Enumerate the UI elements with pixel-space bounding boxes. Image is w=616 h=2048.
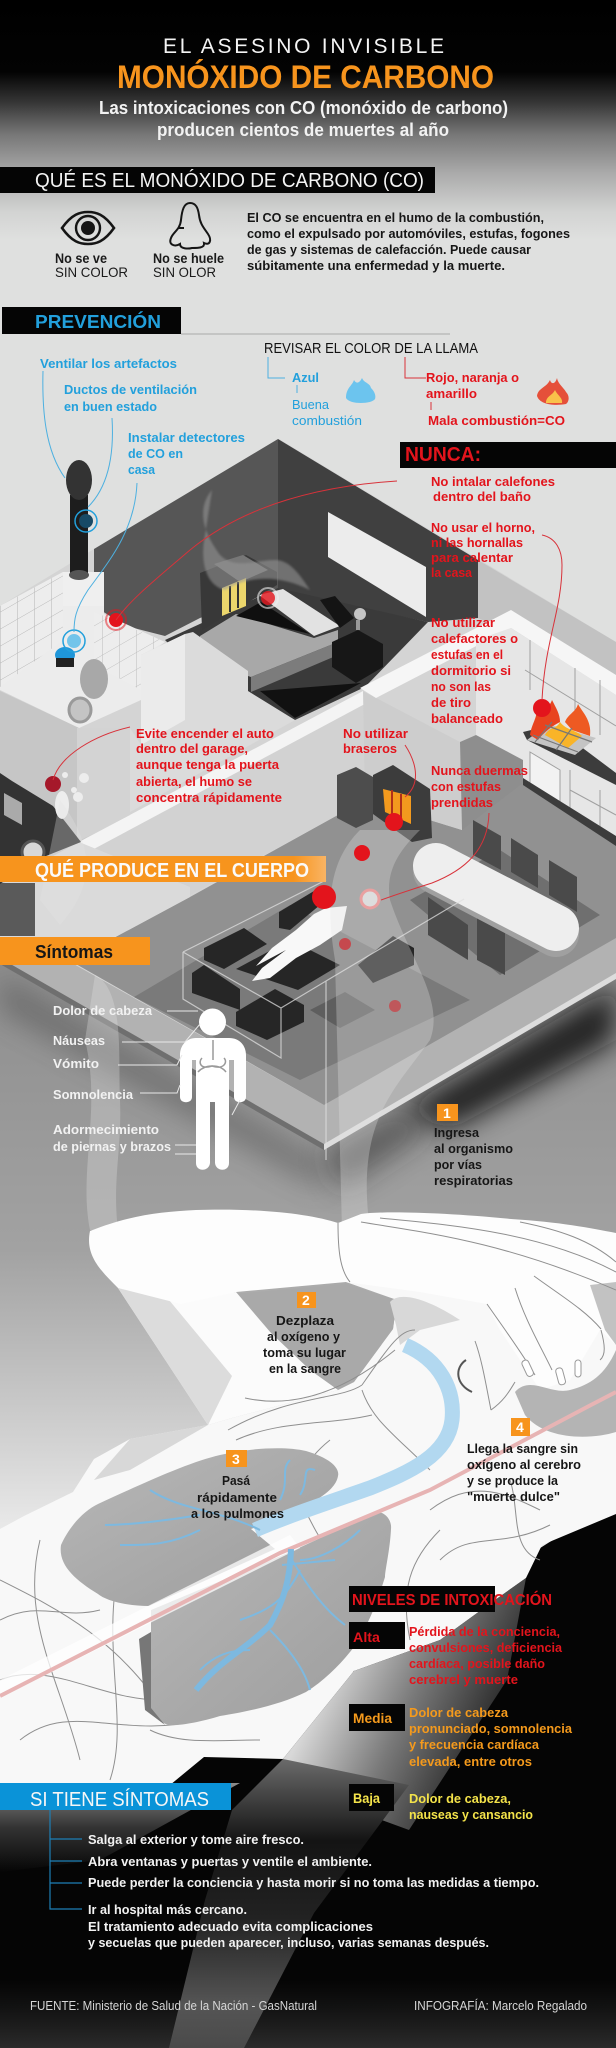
tip: detectores [128, 430, 245, 477]
heading: que produce en el cuerpo: QUÉ PRODUCE EN EL CUERPO [35, 859, 309, 882]
warning: estufas prendidas: prendidas [431, 795, 493, 810]
upper lung [61, 1448, 338, 1606]
low tile wall [94, 612, 165, 690]
level: media: y frecuencia cardíaca [409, 1737, 540, 1752]
blue flame text: Azul [292, 370, 319, 385]
lower grey band [169, 1759, 409, 2048]
nails [521, 1359, 581, 1385]
living room back wall [363, 691, 462, 830]
label: no se ve: No se ve [55, 250, 107, 266]
icon: blue flame [346, 378, 375, 403]
warning: horno: ni las hornallas [431, 535, 523, 550]
warning markers [45, 510, 551, 1012]
lung back edge [139, 1632, 165, 1725]
kitchen counter [523, 725, 616, 785]
under-arm grey [232, 1284, 397, 1390]
red flame text: Mala combustión=CO [428, 413, 565, 428]
step 4: Llega la sangre sin [467, 1441, 578, 1456]
red flame text [426, 370, 565, 428]
step 3: rápidamente [197, 1490, 277, 1505]
level: media [349, 1704, 573, 1769]
night table [332, 608, 383, 683]
step 1: al organismo [434, 1141, 513, 1156]
corner shadow [324, 1110, 430, 1190]
step 2: Dezplaza [276, 1313, 335, 1328]
wall band top [360, 610, 616, 698]
long wall face [79, 691, 365, 895]
step 1: Ingresa [434, 1125, 480, 1140]
warning: calefactores: calefactores o [431, 631, 518, 646]
long wall top [79, 691, 376, 850]
woman illustration [0, 1210, 616, 1785]
fireplace [373, 765, 432, 842]
toilet [69, 659, 108, 722]
label: no se ve: SIN COLOR [55, 264, 128, 280]
kitchen column [460, 735, 523, 830]
dining rug [410, 850, 600, 975]
car exhaust [55, 772, 89, 819]
tip: detectores: de CO en [128, 446, 183, 461]
panel: si tiene sintomas [0, 1783, 539, 1950]
car [0, 773, 81, 884]
storage box [337, 767, 373, 828]
hair shadow top [590, 1282, 616, 1345]
icon: nose [170, 203, 210, 249]
description: como el expulsado por automóviles, estufas, fogones [247, 226, 570, 241]
level: baja: nauseas y cansancio [409, 1807, 533, 1822]
symptom leader lines [118, 1011, 240, 1154]
action list: Abra ventanas y puertas y ventile el ambiente. [88, 1854, 372, 1869]
kitchen base line [523, 778, 616, 846]
heading bar: PREVENCIÓN [35, 311, 161, 332]
heading bar: SI TIENE SÍNTOMAS [30, 1788, 209, 1811]
list connector [50, 1810, 82, 1909]
level: alta: cardíaca, posible daño [409, 1656, 545, 1671]
step 4: oxígeno al cerebro [467, 1457, 581, 1472]
subtitle [99, 98, 508, 140]
kicker: EL ASESINO INVISIBLE [163, 35, 444, 58]
warning: calefactores [431, 615, 518, 726]
step 4: 4 [516, 1419, 524, 1435]
heading: sintomas: Síntomas [35, 942, 113, 962]
glass table outline [183, 880, 464, 1160]
heading bar: NUNCA: [405, 444, 481, 466]
panel: nunca [136, 442, 616, 810]
action list: Puede perder la conciencia y hasta morir si no toma las medidas a tiempo. [88, 1875, 539, 1890]
kitchen wall [476, 628, 616, 842]
level: baja [349, 1784, 533, 1822]
action list [88, 1832, 539, 1950]
description: súbitamente una enfermedad y la muerte. [247, 258, 505, 273]
callout lines: blue [43, 357, 297, 632]
tip: ductos: en buen estado [64, 399, 157, 414]
author credit: INFOGRAFÍA: Marcelo Regalado [414, 1998, 587, 2013]
level: alta: cerebrel y muerte [409, 1672, 518, 1687]
upper arm shade [118, 1288, 232, 1425]
dining table [436, 866, 556, 934]
garage wall [0, 691, 130, 885]
level: media: pronunciado, somnolencia [409, 1721, 573, 1736]
level: baja: Baja [353, 1790, 380, 1806]
description: El CO se encuentra en el humo de la combustión, [247, 210, 544, 225]
black strip [260, 683, 361, 718]
warning: calefactores: balanceado [431, 711, 503, 726]
rear wall left [94, 439, 278, 636]
step 2: toma su lugar [263, 1345, 346, 1360]
label: no se huele: SIN OLOR [153, 264, 216, 280]
blue flame text: combustión [292, 413, 362, 428]
heading: sintomas [0, 937, 150, 965]
step 3: Pasá [222, 1473, 251, 1488]
left body fade [0, 1783, 240, 1872]
heading: NIVELES DE INTOXICACIÓN [352, 1590, 552, 1609]
section: prevencion [2, 307, 569, 477]
tip: detectores: Instalar detectores [128, 430, 245, 445]
label: no se huele [153, 250, 224, 280]
house illustration [0, 439, 616, 1230]
tip: detectores: casa [128, 462, 156, 477]
step 3: a los pulmones [191, 1506, 284, 1521]
wardrobe [200, 555, 277, 630]
white band [0, 1535, 300, 1698]
step 2: 2 [302, 1292, 310, 1308]
label: no se ve [55, 250, 128, 280]
label: no se huele: No se huele [153, 250, 224, 266]
tip: ductos [64, 382, 197, 414]
level: media: Dolor de cabeza [409, 1705, 509, 1720]
step 1 [434, 1104, 513, 1188]
step 3 [191, 1450, 284, 1521]
warning: auto: dentro del garage, [136, 741, 248, 756]
warning: horno: para calentar [431, 550, 513, 565]
shoulder shade [94, 1425, 208, 1480]
rear wall right [278, 439, 478, 622]
icon: red flame [537, 378, 569, 405]
heading bar [0, 1783, 231, 1811]
upper grey band [283, 1578, 526, 1830]
warning: calefones: No intalar calefones [431, 474, 555, 489]
warning: auto: concentra rápidamente [136, 790, 282, 805]
heading bar: QUÉ ES EL MONÓXIDO DE CARBONO (CO) [35, 169, 424, 192]
warning: horno [431, 520, 535, 580]
warning: braseros: No utilizar [343, 726, 408, 741]
action list: El tratamiento adecuado evita complicaciones [88, 1919, 373, 1934]
tip: ductos: Ductos de ventilación [64, 382, 197, 397]
symptom labels: Vómito [53, 1056, 99, 1071]
warning: horno: No usar el horno, [431, 520, 535, 535]
heading bar [400, 442, 616, 468]
wall band right [478, 560, 616, 680]
warning: calefactores: de tiro [431, 695, 471, 710]
callout lines: red [53, 357, 562, 900]
symptom labels [53, 1003, 171, 1154]
flame heading: REVISAR EL COLOR DE LA LLAMA [264, 341, 478, 357]
warning: calefactores: dormitorio si [431, 663, 511, 678]
symptom labels: Náuseas [53, 1033, 105, 1048]
heading [349, 1586, 552, 1612]
level: alta [349, 1622, 563, 1687]
bathroom block [0, 572, 165, 728]
level: alta: Alta [353, 1629, 380, 1645]
level: alta: Pérdida de la conciencia, [409, 1624, 560, 1639]
forearm and hand [89, 1210, 616, 1390]
bedroom smoke [203, 490, 310, 590]
closed eye [458, 1360, 472, 1392]
step 4: "muerte dulce" [467, 1489, 560, 1504]
bedroom window [328, 512, 426, 617]
partition light face [141, 634, 185, 745]
heading bar [2, 307, 450, 334]
step 2: al oxígeno y [267, 1329, 341, 1344]
ground shadow right [400, 985, 616, 1130]
lower lung [148, 1512, 391, 1725]
upper arm [118, 1288, 338, 1425]
kitchen cabinets [525, 640, 616, 835]
action list: Ir al hospital más cercano. [88, 1902, 247, 1917]
hand and hair lines [0, 1218, 616, 1780]
red flame text: amarillo [426, 386, 477, 401]
symptom labels: Dolor de cabeza [53, 1003, 153, 1018]
stove fire [527, 700, 596, 755]
level: baja: Dolor de cabeza, [409, 1791, 511, 1806]
level: alta: convulsiones, deficiencia [409, 1640, 563, 1655]
warning: auto: aunque tenga la puerta [136, 757, 280, 772]
step 2 [263, 1292, 346, 1376]
warning: estufas prendidas [431, 763, 528, 810]
hair by forehead [390, 1297, 460, 1345]
warning: auto: Evite encender el auto [136, 726, 274, 741]
action list: Salga al exterior y tome aire fresco. [88, 1832, 304, 1847]
description: de gas y sistemas de calefacción. Puede causar [247, 242, 531, 257]
living room floor [60, 783, 616, 1105]
symptom labels: de piernas y brazos [53, 1139, 171, 1154]
warning: braseros: braseros [343, 741, 397, 756]
icon: eye [62, 212, 114, 244]
warning: calefones: dentro del baño [433, 489, 531, 504]
CO detector [55, 647, 75, 667]
house footprint [0, 439, 616, 1148]
warning: braseros [343, 726, 408, 756]
bed [200, 589, 354, 692]
step 4: y se produce la [467, 1473, 559, 1488]
step 3: 3 [232, 1451, 240, 1467]
warning: auto: abierta, el humo se [136, 774, 252, 789]
garage side wall [77, 728, 130, 842]
left front wall [0, 842, 190, 962]
warning: calefones [431, 474, 555, 504]
step 2: en la sangre [269, 1361, 341, 1376]
blue flame text [292, 370, 362, 428]
symptom labels: Somnolencia [53, 1087, 134, 1102]
tile wall [0, 572, 63, 687]
hair shadow near hand [515, 1350, 616, 1437]
step 1: respiratorias [434, 1173, 513, 1188]
warning: estufas prendidas: Nunca duermas [431, 763, 528, 778]
warning: estufas prendidas: con estufas [431, 779, 501, 794]
rug [134, 905, 470, 1080]
step 4 [467, 1418, 581, 1504]
red flame text: Rojo, naranja o [426, 370, 519, 385]
chimney [63, 460, 104, 606]
subtitle: producen cientos de muertes al año [157, 120, 449, 140]
ground shadow left [0, 975, 324, 1190]
rising smoke columns [40, 800, 434, 1230]
warning: horno: la casa [431, 565, 473, 580]
action list: y secuelas que pueden aparecer, incluso, varias semanas después. [88, 1935, 489, 1950]
partition wall [130, 632, 295, 812]
tip: ventilar: Ventilar los artefactos [40, 356, 177, 371]
blue airway [105, 1345, 452, 1690]
level: media: elevada, entre otros [409, 1754, 532, 1769]
warning: auto [136, 726, 282, 805]
door frame [0, 883, 35, 936]
person lying [252, 906, 347, 981]
symptom labels: Adormecimiento [53, 1122, 159, 1137]
title [99, 35, 508, 140]
dark lower background [0, 1578, 526, 2048]
artery [0, 1392, 616, 1696]
source credit: FUENTE: Ministerio de Salud de la Nación - GasNatural [30, 1998, 317, 2013]
section: que es [0, 167, 570, 280]
level: media: Media [353, 1710, 392, 1726]
body [0, 1260, 616, 1785]
subtitle: Las intoxicaciones con CO (monóxido de carbono) [99, 98, 508, 118]
step 1: por vías [434, 1157, 482, 1172]
panel: niveles de intoxicacion [349, 1586, 573, 1822]
coffee table [310, 992, 375, 1028]
description [247, 210, 570, 273]
icon: human [180, 1008, 246, 1170]
symptoms body figure [53, 1003, 246, 1170]
step 1: 1 [443, 1105, 451, 1121]
bedroom floor [165, 588, 428, 720]
slab edge [0, 935, 616, 1150]
warning: calefactores: no son las [431, 679, 491, 694]
main title: MONÓXIDO DE CARBONO [117, 59, 494, 95]
blue flame text: Buena [292, 397, 330, 412]
chairs [428, 820, 577, 975]
warning: calefactores: No utilizar [431, 615, 495, 630]
warning: calefactores: estufas en el [431, 647, 503, 662]
sofas [192, 891, 414, 1040]
